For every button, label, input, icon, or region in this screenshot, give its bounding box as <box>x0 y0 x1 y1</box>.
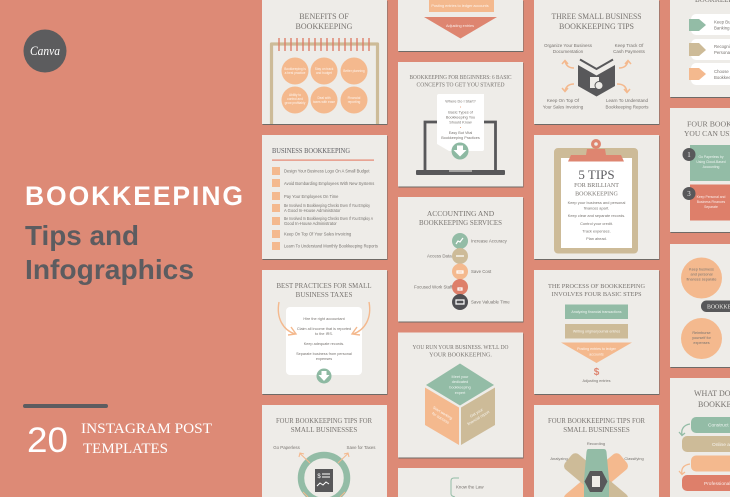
step 2 <box>565 324 628 338</box>
step text: Analyzing financial transactions <box>571 310 622 314</box>
cube face text: dedicated <box>452 380 468 384</box>
tip labels: Learn To Understand <box>606 98 648 103</box>
title: BOOKKEEPING SERVICES <box>419 218 502 227</box>
number badges <box>682 148 696 200</box>
tips text: Keep clear and separate records. <box>568 213 625 218</box>
panel: business bookkeeping list <box>262 135 388 260</box>
cube face text <box>431 375 491 426</box>
benefit circle labels: control and <box>287 97 303 101</box>
benefit circle labels: a best practice <box>285 71 306 75</box>
benefit circle labels: Deal with <box>317 96 331 100</box>
cube face text: Meet your <box>452 375 469 379</box>
circle text: expenses <box>693 341 710 345</box>
icon: notebook frame with spiral <box>272 38 378 124</box>
coral funnel <box>424 17 497 38</box>
list text: Keep On Top Of Your Sales Invoicing <box>284 232 352 236</box>
title <box>276 282 372 299</box>
note text: Bookkeeping Practices <box>441 136 480 140</box>
list text: Pay Your Employees On Time <box>284 194 339 199</box>
panel: process of bookkeeping four steps <box>534 270 660 395</box>
title <box>694 389 730 409</box>
title: BOOKKEEPING <box>296 22 353 31</box>
icon: dollar: $ <box>594 367 600 378</box>
tips text: finances apart. <box>584 206 609 210</box>
petal labels: Classifying <box>624 456 644 461</box>
cube face text: financial report <box>467 410 491 426</box>
list text <box>284 168 378 248</box>
curved arrow: sage <box>679 424 690 436</box>
benefit circle labels: taxes with ease <box>313 100 335 104</box>
petal labels: Analyzing <box>550 456 568 461</box>
benefit circle labels: Ability to <box>289 93 301 97</box>
list text: Be Involved In Bookkeeping Checks Even If You Employ A <box>284 216 373 221</box>
card text <box>296 317 352 361</box>
bar text: Online a <box>712 442 730 448</box>
tag text: Choose <box>714 69 729 74</box>
title: FOUR BOOKKEEPING TIPS FOR <box>548 417 645 425</box>
left cover column <box>23 30 243 460</box>
icon: Canva logo: Canva <box>30 43 60 58</box>
title <box>412 345 509 358</box>
title: THREE SMALL BUSINESS <box>552 12 642 21</box>
title: BUSINESS BOOKKEEPING <box>272 146 351 155</box>
panel: what do bookkeepers do <box>670 378 730 497</box>
note text: Easy But Vital <box>449 131 472 135</box>
cube right face <box>461 388 495 445</box>
benefit circle labels: reporting <box>348 100 361 104</box>
list text: Design Your Business Logo On A Small Budget <box>284 168 370 174</box>
arrow: left curved <box>278 302 296 335</box>
icon: dark document: $ <box>317 474 321 480</box>
tip labels: Keep On Top Of <box>547 98 580 103</box>
card text: Hire the right accountant <box>303 317 346 321</box>
cube face text: Get your <box>469 407 484 419</box>
card text: Separate <box>704 205 718 209</box>
step 3 funnel <box>561 342 632 363</box>
title: WHAT DO <box>694 389 730 398</box>
benefit circle labels: and budget <box>316 71 332 75</box>
icon: Canva logo <box>24 30 66 72</box>
number badges: 1 <box>687 151 691 159</box>
bar text <box>704 422 730 487</box>
note text: • <box>460 126 462 130</box>
tip labels <box>273 445 376 450</box>
step text: Posting entries to ledger accounts <box>431 4 489 8</box>
arrows out of ring <box>299 453 349 497</box>
title: BUSINESS TAXES <box>296 291 352 299</box>
title: ACCOUNTING AND <box>427 209 495 218</box>
arrow tags <box>689 19 706 80</box>
paper <box>561 158 632 248</box>
service labels: Increase Accuracy <box>471 238 508 244</box>
list text: Good In-House Administrator <box>284 221 337 226</box>
funnel text: Adjusting entries <box>446 24 474 28</box>
title: BOOKKEEPING TIPS <box>559 22 634 31</box>
dark pill <box>701 300 730 312</box>
subheading <box>574 183 619 198</box>
title <box>684 120 730 138</box>
title: BOOKKEEPING FOR BEGINNERS: 6 BASIC <box>410 75 512 81</box>
list text: Learn To Understand Monthly Bookkeeping Reports <box>284 244 378 248</box>
card text <box>696 155 726 209</box>
tip labels: Go Paperless <box>273 445 301 450</box>
step text: accounts <box>589 352 604 356</box>
title: BENEFITS OF <box>299 12 349 21</box>
step 4 label: Adjusting entries <box>582 379 611 383</box>
panel: 5 tips clipboard <box>534 135 660 260</box>
card text: Go Paperless by <box>698 155 724 159</box>
subheading: Tips and Infographics: Infographics <box>25 254 194 285</box>
sage bracket <box>451 478 459 497</box>
note text: Bookkeeping You <box>446 116 475 120</box>
label: Know the Law <box>456 484 484 490</box>
tip labels: Organize Your Business <box>544 43 593 48</box>
tip labels: Save for Taxes <box>347 445 376 450</box>
icon: laptop <box>416 122 505 175</box>
title <box>548 283 645 298</box>
icon: green download circle <box>452 142 468 160</box>
cube face text: for success <box>431 411 450 425</box>
title: YOUR BOOKKEEPING. <box>429 352 492 358</box>
title: SMALL BUSINESSES <box>563 426 630 434</box>
service labels: Save Valuable Time <box>471 300 510 304</box>
step 1 <box>565 304 628 319</box>
card text: to the IRS. <box>315 332 333 336</box>
icon: open book <box>578 60 615 96</box>
benefit circle labels: grow profitably <box>285 101 306 105</box>
title <box>276 417 372 434</box>
tip labels <box>543 43 649 110</box>
service labels: Save Cost <box>471 269 492 274</box>
title: BEST PRACTICES FOR SMALL <box>276 282 372 290</box>
card text: Claim all income that is reported <box>297 327 351 331</box>
clipboard board <box>554 148 638 254</box>
bar text: Professional <box>704 481 730 487</box>
benefit circle labels: Stay on track <box>315 67 334 71</box>
card text: expenses <box>316 357 332 361</box>
title <box>552 12 642 31</box>
circle text: yourself for <box>692 336 712 340</box>
list text: Avoid Bombarding Employees With New Systems <box>284 181 374 186</box>
divider bar <box>23 404 108 408</box>
card text: Keep adequate records. <box>304 342 344 346</box>
subheading: Tips and Infographics: Tips and <box>25 220 139 251</box>
circle text: and personal <box>691 272 713 276</box>
petal labels <box>550 441 644 461</box>
panel: bookkeeping for beginners laptop <box>398 62 524 188</box>
cube face text: expert <box>455 391 466 395</box>
title: YOU RUN YOUR BUSINESS. WE'LL DO <box>412 345 509 351</box>
arrow: right curved <box>352 302 370 335</box>
card text: Keep Personal and <box>697 195 726 199</box>
label: Instagram post templates: TEMPLATES <box>83 441 168 457</box>
number badges: 3 <box>687 190 691 198</box>
tag text <box>714 20 730 80</box>
cube top face <box>426 364 494 406</box>
step text: Posting entries to ledger <box>577 347 617 351</box>
step text <box>571 310 622 356</box>
title: FOUR BOOKKEEPING TIPS FOR <box>276 417 372 425</box>
bar text: Construct <box>708 422 729 428</box>
subheading: FOR BRILLIANT <box>574 183 619 189</box>
service labels <box>414 238 510 304</box>
benefit circle labels: Better planning <box>343 69 365 73</box>
peach step bar <box>429 0 494 12</box>
panel: circles and bookkeeping pill <box>670 244 730 368</box>
service labels: Focused Work Staff <box>414 284 453 290</box>
white pills <box>691 14 730 85</box>
title: CONCEPTS TO GET YOU STARTED <box>416 82 504 88</box>
title: THE PROCESS OF BOOKKEEPING <box>548 283 645 290</box>
title: SMALL BUSINESSES <box>291 426 357 434</box>
panel: process ending (top of column 2) <box>398 0 524 52</box>
tips text: Keep your business and personal <box>568 200 626 205</box>
white note card <box>437 94 484 151</box>
card text: Accounting <box>703 165 719 169</box>
white card <box>286 307 362 375</box>
tips text: Track expenses. <box>582 228 611 234</box>
clip <box>568 139 624 162</box>
label: Instagram post templates: INSTAGRAM POST <box>81 421 212 437</box>
panel: best practices for small business taxes <box>262 270 388 395</box>
title <box>419 209 502 227</box>
benefit circle labels <box>284 67 365 105</box>
card text: Business Finances <box>697 200 726 204</box>
petal labels: Recording <box>587 441 605 446</box>
circle text <box>687 268 716 345</box>
service labels: Access Data <box>427 254 452 258</box>
note text: Basic Types of <box>448 110 474 114</box>
circle text: Keep business <box>689 268 714 272</box>
ring <box>301 455 347 497</box>
numbered squares <box>272 167 280 250</box>
curved arrow: peach <box>679 464 690 474</box>
list text: A Good In-House Administrator <box>284 208 341 213</box>
heading: BOOKKEEPING: BOOKKEEPING <box>25 181 243 211</box>
panel: benefits of bookkeeping <box>262 0 388 125</box>
tip labels: Bookkeeping Reports <box>605 104 649 110</box>
title <box>410 75 512 88</box>
title underline <box>272 160 374 161</box>
step text: Writing original journal entries <box>573 330 620 334</box>
benefit circle labels: Bookkeeping is <box>284 67 306 71</box>
icon: dark hexagon <box>584 471 608 492</box>
note text: • <box>460 105 462 109</box>
heading: 5 TIPS <box>578 167 615 182</box>
circle text: finances separate <box>687 278 716 282</box>
subheading: BOOKKEEPING <box>575 192 618 198</box>
coral card <box>690 184 730 220</box>
tip labels: Your Sales Invoicing <box>543 104 584 110</box>
circle text: Reimburse <box>692 331 711 335</box>
note text <box>441 100 480 140</box>
panel: four bookkeeping tips you can use <box>670 108 730 233</box>
card text: Separate business from personal <box>296 352 352 356</box>
tip labels: Keep Track Of <box>615 43 644 48</box>
tips text: Plan ahead. <box>586 236 607 241</box>
label: Instagram post templates <box>81 421 212 457</box>
panel: four bookkeeping tips ring <box>262 405 387 497</box>
benefit circles <box>282 58 368 114</box>
note text: Should Know <box>449 120 472 124</box>
tips text: Control your credit. <box>580 221 613 226</box>
cube face text: Start working <box>432 406 453 421</box>
panel: accounting and bookkeeping services <box>398 197 524 322</box>
number 20: 20 <box>27 421 68 460</box>
panel: you run your business cube <box>398 332 524 458</box>
title <box>296 12 353 31</box>
panel: four bookkeeping tips petals <box>534 405 659 497</box>
tip labels: Documentation <box>553 49 584 54</box>
service circles <box>452 233 468 310</box>
tip labels: Cash Payments <box>613 49 646 54</box>
sage card <box>690 145 730 181</box>
peach circles <box>681 258 722 359</box>
title: INVOLVES FOUR BASIC STEPS <box>552 291 642 298</box>
vertical petal <box>584 449 609 497</box>
panel: know the law (bottom of column 2) <box>398 468 523 497</box>
arrows <box>562 60 631 92</box>
icon: green download circle <box>316 368 332 384</box>
subheading: Tips and Infographics <box>25 220 194 285</box>
option bars <box>682 417 730 491</box>
cube face text: bookkeeping <box>449 386 471 390</box>
panel: three small business bookkeeping tips <box>534 0 660 125</box>
benefit circle labels: Financial <box>348 96 361 100</box>
card text: Using Cloud-Based <box>696 160 726 164</box>
cube left face <box>425 388 459 445</box>
title <box>548 417 645 434</box>
tips text <box>568 200 626 241</box>
diagonal petals <box>562 451 630 497</box>
list text: Be Involved In Bookkeeping Checks Even If You Employ <box>284 203 371 208</box>
panel: column 4 top tags <box>670 0 730 98</box>
note text: Where Do I Start? <box>445 100 476 104</box>
